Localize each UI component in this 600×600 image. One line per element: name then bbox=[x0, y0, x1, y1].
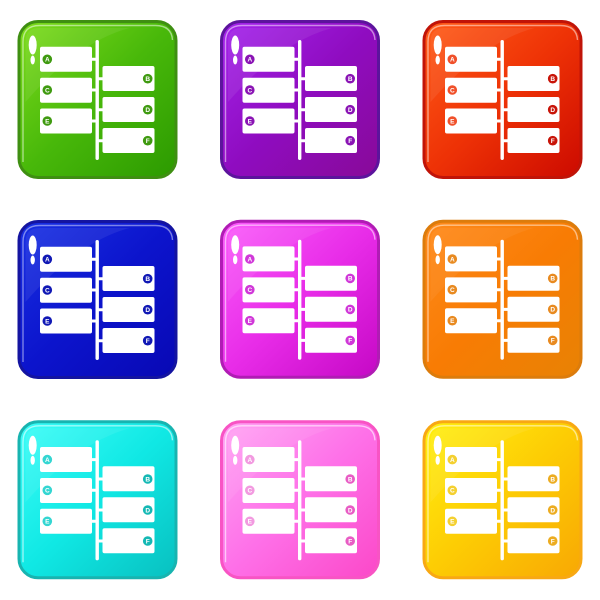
icon: cyan timeline tile: B bbox=[145, 476, 150, 483]
icon: blue timeline tile: E bbox=[45, 318, 50, 325]
icon: blue timeline tile: B bbox=[145, 276, 150, 283]
icon: purple timeline tile: E bbox=[248, 118, 253, 125]
icon: red timeline tile: E bbox=[450, 118, 455, 125]
icon: red timeline tile: D bbox=[550, 107, 555, 114]
icon: cyan timeline tile: A bbox=[45, 457, 50, 464]
icon: cyan timeline tile bbox=[19, 422, 176, 578]
icon: magenta timeline tile: D bbox=[348, 307, 353, 314]
icon: red timeline tile: B bbox=[550, 76, 555, 83]
icon: orange timeline tile: C bbox=[450, 287, 455, 294]
icon: green timeline tile: D bbox=[145, 107, 150, 114]
icon: orange timeline tile: A bbox=[450, 256, 455, 263]
icon: purple timeline tile: C bbox=[247, 87, 252, 94]
icon: cyan timeline tile: F bbox=[146, 538, 150, 545]
icon: yellow timeline tile: C bbox=[450, 488, 455, 495]
icon: purple timeline tile bbox=[222, 22, 378, 178]
icon: green timeline tile: F bbox=[146, 138, 150, 145]
icon: orange timeline tile: F bbox=[551, 338, 555, 345]
icon: pink timeline tile: E bbox=[248, 519, 253, 526]
icon: magenta timeline tile: C bbox=[247, 287, 252, 294]
icon: magenta timeline tile: B bbox=[348, 276, 353, 283]
icon: yellow timeline tile: A bbox=[450, 457, 455, 464]
icon: yellow timeline tile bbox=[424, 422, 581, 578]
icon: pink timeline tile bbox=[222, 422, 378, 578]
icon: cyan timeline tile: E bbox=[45, 519, 50, 526]
icon: pink timeline tile: F bbox=[348, 538, 352, 545]
icon: magenta timeline tile bbox=[222, 221, 378, 377]
icon: green timeline tile: A bbox=[45, 57, 50, 64]
icon: green timeline tile: B bbox=[145, 76, 150, 83]
icon: purple timeline tile: D bbox=[348, 107, 353, 114]
icon: yellow timeline tile: E bbox=[450, 519, 455, 526]
icon: orange timeline tile bbox=[424, 221, 581, 377]
icon: orange timeline tile: E bbox=[450, 318, 455, 325]
icon: cyan timeline tile: D bbox=[145, 507, 150, 514]
icon: blue timeline tile: C bbox=[45, 287, 50, 294]
icon: purple timeline tile: A bbox=[247, 57, 252, 64]
icon: blue timeline tile: A bbox=[45, 257, 50, 264]
icon: pink timeline tile: D bbox=[348, 507, 353, 514]
icon: pink timeline tile: C bbox=[247, 488, 252, 495]
icon: magenta timeline tile: E bbox=[248, 318, 253, 325]
icon: magenta timeline tile: F bbox=[348, 338, 352, 345]
icon: blue timeline tile: F bbox=[146, 338, 150, 345]
icon: red timeline tile bbox=[424, 22, 581, 178]
icon: orange timeline tile: B bbox=[550, 276, 555, 283]
icon: blue timeline tile bbox=[19, 222, 176, 378]
icon: orange timeline tile: D bbox=[550, 307, 555, 314]
icon: magenta timeline tile: A bbox=[247, 256, 252, 263]
icon: yellow timeline tile: F bbox=[551, 538, 555, 545]
icon: red timeline tile: F bbox=[551, 138, 555, 145]
icon: red timeline tile: A bbox=[450, 57, 455, 64]
icon: cyan timeline tile: C bbox=[45, 488, 50, 495]
icon: blue timeline tile: D bbox=[145, 307, 150, 314]
icon: pink timeline tile: B bbox=[348, 476, 353, 483]
icon: green timeline tile: E bbox=[45, 118, 50, 125]
icon: yellow timeline tile: B bbox=[550, 476, 555, 483]
icon: purple timeline tile: F bbox=[348, 138, 352, 145]
icon: yellow timeline tile: D bbox=[550, 507, 555, 514]
icon: green timeline tile bbox=[19, 22, 176, 178]
icon: red timeline tile: C bbox=[450, 87, 455, 94]
icon: pink timeline tile: A bbox=[247, 457, 252, 464]
icon: purple timeline tile: B bbox=[348, 76, 353, 83]
icon: green timeline tile: C bbox=[45, 87, 50, 94]
